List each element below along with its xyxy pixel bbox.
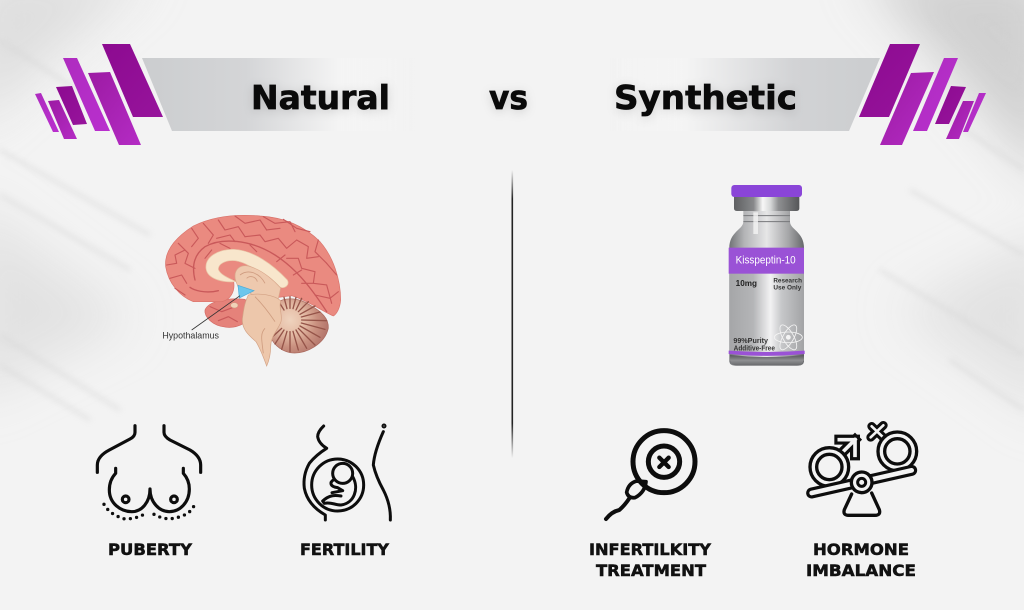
left purple logo bars — [35, 44, 163, 145]
labels: hormone imbalance: IMBALANCE — [806, 561, 916, 580]
leader line — [192, 296, 240, 330]
header band: Synthetic — [610, 58, 880, 131]
atom mark — [774, 323, 802, 352]
labels: infertility treatment — [589, 540, 711, 580]
title: Natural: Natural — [251, 78, 390, 117]
icon: puberty — [97, 426, 201, 519]
purple cap — [731, 185, 802, 197]
vial name: Kisspeptin-10 — [736, 255, 796, 267]
label: puberty: PUBERTY — [108, 540, 192, 559]
illustration: brain with hypothalamus — [162, 215, 341, 366]
temporal lobe — [205, 299, 252, 327]
pituitary — [231, 303, 238, 308]
purity text: 99%Purity — [733, 338, 768, 345]
label: fertility: FERTILITY — [300, 540, 389, 559]
header band: Natural — [142, 58, 415, 131]
cerebrum — [166, 215, 341, 316]
hypothalamus label: Hypothalamus — [162, 330, 219, 340]
purity text: Additive-Free — [734, 346, 775, 353]
research use text: Research — [773, 277, 802, 284]
center divider — [512, 170, 513, 458]
icon: hormone imbalance — [810, 425, 917, 515]
purple bottom stripe — [729, 351, 805, 356]
vial base — [730, 355, 804, 366]
research use text — [773, 277, 802, 292]
crimp — [734, 196, 799, 211]
cerebral folds — [167, 216, 338, 312]
labels: infertility treatment: INFERTILKITY — [589, 540, 711, 559]
dose: 10mg — [736, 279, 757, 288]
labels: infertility treatment: TREATMENT — [596, 561, 706, 580]
brainstem — [242, 294, 281, 366]
icon: infertility treatment — [606, 431, 695, 519]
silver label — [729, 272, 804, 352]
title: Synthetic: Synthetic — [614, 78, 797, 117]
right purple logo bars — [859, 44, 986, 145]
purity text — [733, 338, 775, 353]
purple label band — [729, 248, 804, 274]
cerebellum — [268, 297, 328, 353]
title: vs: vs — [489, 78, 528, 117]
research use text: Use Only — [773, 285, 802, 292]
labels: hormone imbalance — [806, 540, 916, 580]
hypothalamus highlight — [238, 285, 254, 298]
illustration: Kisspeptin-10 vial — [729, 185, 805, 366]
corpus callosum — [206, 249, 288, 288]
labels: hormone imbalance: HORMONE — [813, 540, 909, 559]
icon: fertility — [304, 425, 390, 520]
inner diencephalon — [235, 266, 281, 299]
vial glass — [729, 211, 804, 366]
